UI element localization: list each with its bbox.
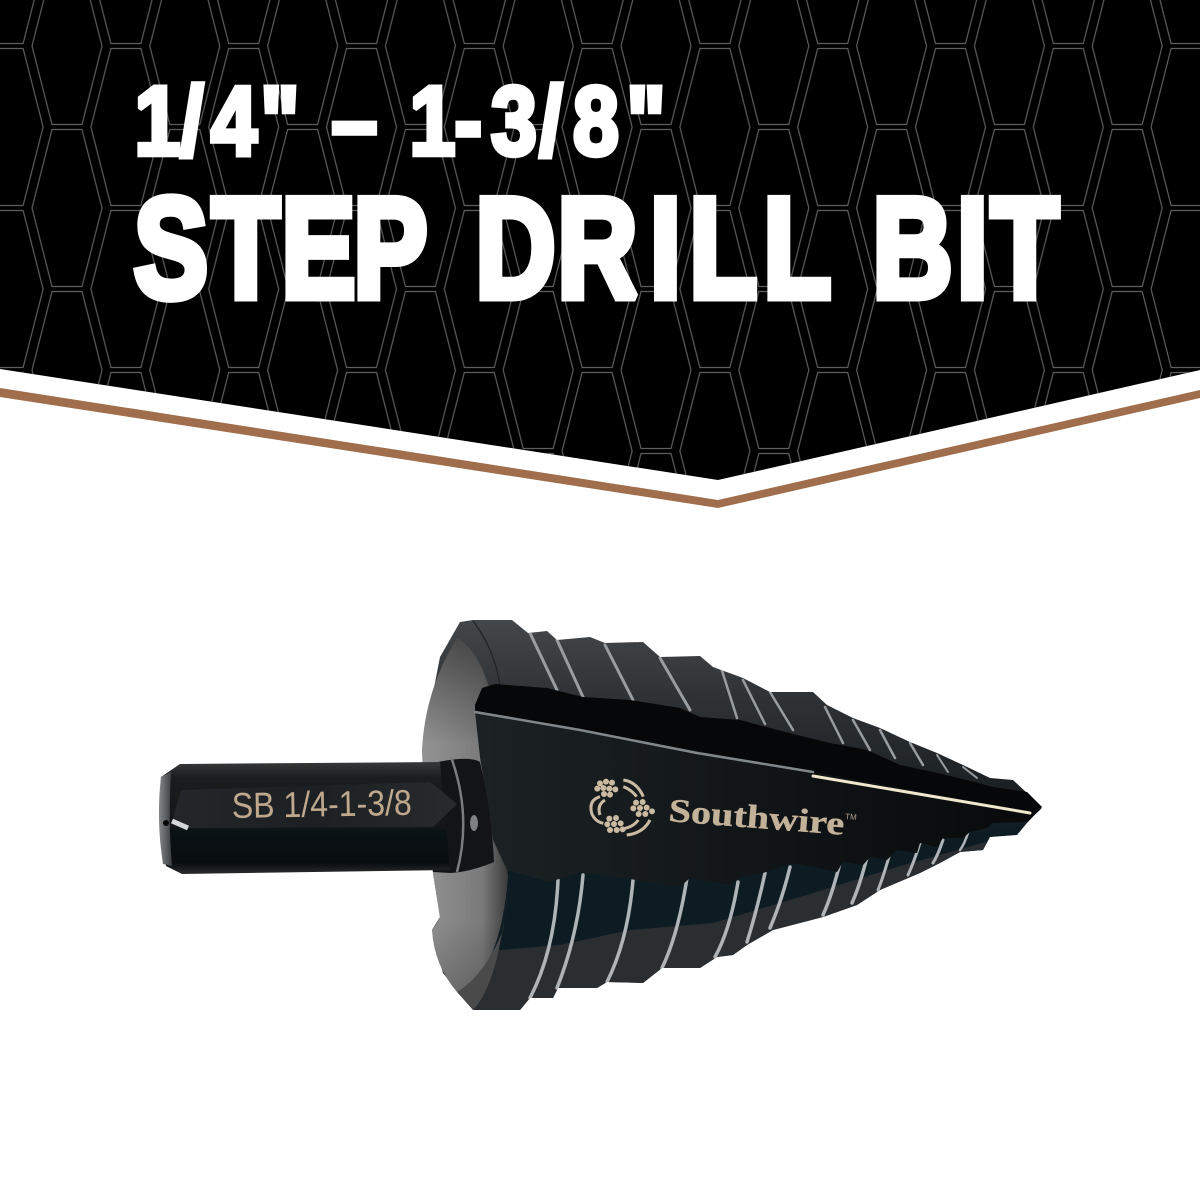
back face of the largest step <box>422 621 508 1010</box>
stepped cone body silhouette <box>422 620 1042 1010</box>
lower gray reflection on the steps <box>440 838 1000 1020</box>
step edge highlights, lower side <box>530 833 968 998</box>
copper chevron stripe <box>0 388 1200 508</box>
step edge highlights, upper side <box>530 633 977 778</box>
flute: dark band above ridge and face below <box>475 684 1042 887</box>
header banner: black chevron with hexagon pattern <box>0 0 1200 480</box>
ridge highlight along the flute <box>475 712 1030 813</box>
title line 2: product name: STEP DRILL BIT <box>134 169 1059 327</box>
brand logo: wire strand circle <box>591 779 655 835</box>
product photo: step drill bit <box>159 620 1042 1020</box>
trademark: TM <box>845 812 857 822</box>
title line 1: size range: 1/4" – 1-3/8" <box>134 68 666 176</box>
shank with hex flat <box>159 762 457 874</box>
brand name: Southwire <box>667 793 846 843</box>
collar between shank and body <box>433 757 494 873</box>
shank engraving: SB 1/4-1-3/8 <box>231 782 412 826</box>
